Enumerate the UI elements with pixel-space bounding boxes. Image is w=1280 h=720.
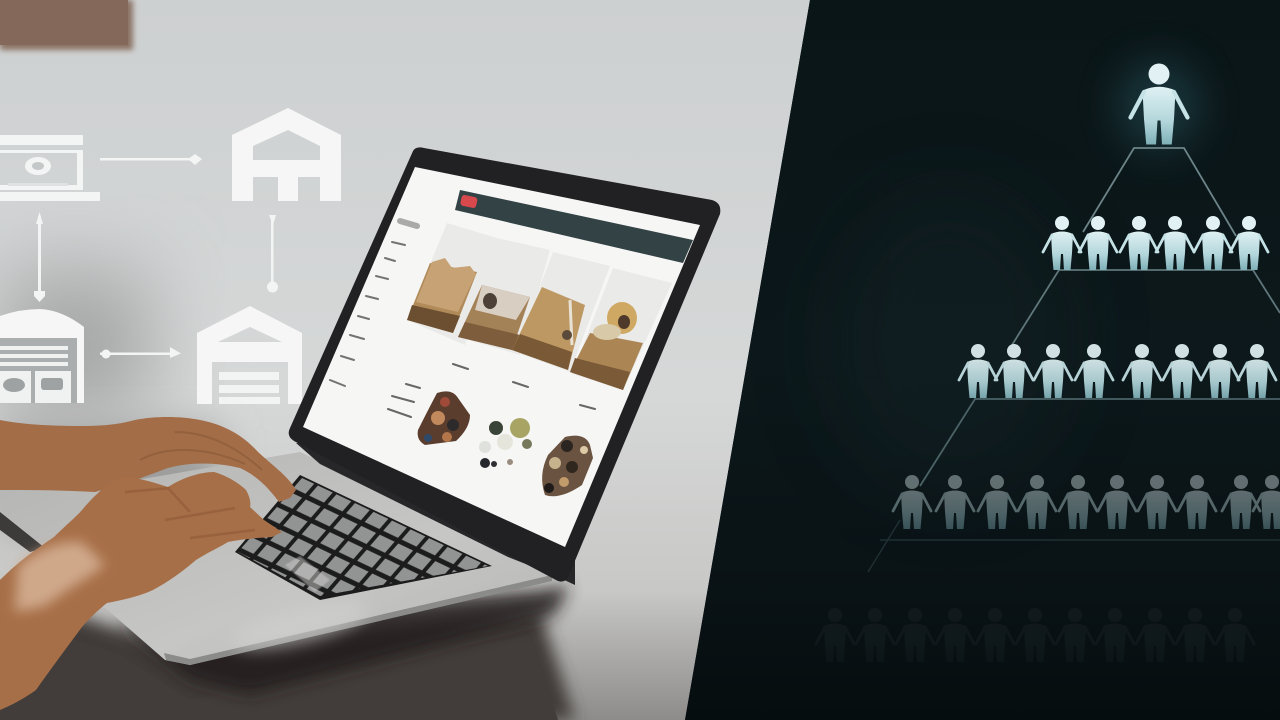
background wall and table: [0, 0, 810, 720]
product photo 2: [458, 285, 530, 350]
arrow: left vertical: [34, 212, 45, 302]
product photo 3: [512, 287, 585, 370]
collage 2: [479, 418, 532, 468]
product photo 4: [570, 302, 643, 390]
forearm highlight: [15, 542, 105, 612]
people row 4: [893, 475, 1280, 529]
product cards: [407, 223, 672, 390]
arrow: right vertical: [267, 215, 278, 292]
upper hand finger shading: [140, 432, 262, 470]
dark background: [685, 0, 1094, 720]
glow behind top person: [1117, 59, 1201, 151]
panel: dark pyramid side: [685, 0, 1280, 720]
hand: upper: [0, 417, 296, 502]
people row 3: [959, 344, 1276, 398]
hand: lower with forearm: [0, 472, 282, 710]
pyramid lines: [868, 148, 1280, 572]
laptop shadow on table: [120, 585, 570, 695]
lower hand finger shading: [125, 488, 255, 538]
icon: warehouse door slats: [219, 372, 280, 404]
collage 3: [542, 436, 593, 496]
laptop: keyboard: [235, 475, 492, 600]
app header bar: [455, 190, 693, 263]
icon: laptop with cloud: [0, 135, 100, 201]
icon: warehouse bottom right: [197, 306, 302, 404]
laptop: hinge: [296, 443, 575, 585]
laptop: display: [303, 167, 700, 547]
person: top leader: [1130, 64, 1188, 144]
app logo: [460, 195, 478, 208]
people row 2: [1043, 216, 1268, 270]
people row 5 silhouettes: [816, 608, 1254, 662]
product photo 1: [407, 258, 477, 333]
collage captions: [388, 364, 595, 417]
arrow: bottom horizontal: [100, 347, 181, 358]
laptop: base: [0, 452, 552, 665]
arrow: laptop to warehouse: [100, 154, 202, 165]
icon: warehouse top right: [232, 108, 341, 201]
laptop: screen bezel: [289, 147, 720, 582]
sidebar labels: [330, 221, 417, 386]
panel: laptop photo side: [0, 0, 810, 720]
icon: warehouse bottom left: [0, 309, 84, 403]
collage 1: [418, 391, 470, 445]
